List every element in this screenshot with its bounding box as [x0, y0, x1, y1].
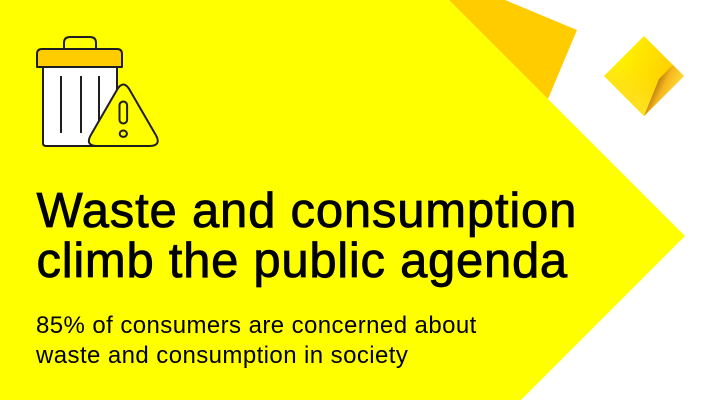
title	[36, 184, 577, 288]
bin lid	[37, 49, 122, 67]
bin stripes	[61, 76, 99, 133]
bin body	[43, 67, 117, 146]
title: climb the public agenda	[36, 234, 568, 288]
subtitle: waste and consumption in society	[36, 342, 408, 369]
subtitle: 85% of consumers are concerned about	[36, 312, 477, 339]
bin handle	[64, 37, 96, 49]
warning triangle	[89, 84, 158, 146]
subtitle	[36, 312, 477, 369]
title: Waste and consumption	[36, 184, 577, 238]
orange folded shape	[449, 0, 577, 99]
icon: trash bin with warning triangle	[37, 37, 158, 146]
logo diamond	[604, 36, 684, 116]
exclamation mark	[120, 102, 127, 124]
